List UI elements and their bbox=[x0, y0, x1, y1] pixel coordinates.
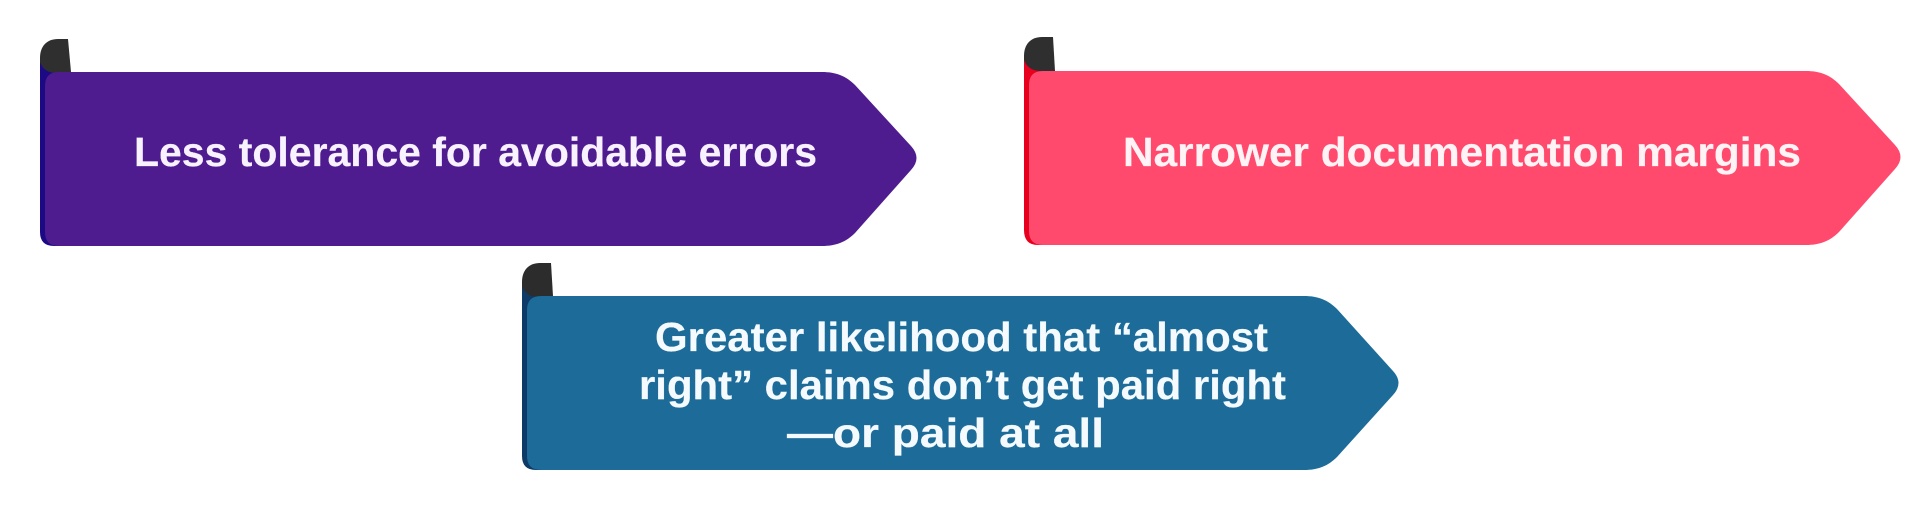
banner: greater likelihood bbox=[522, 263, 1398, 470]
banner: narrower documentation margins bbox=[1024, 37, 1900, 245]
label: greater likelihood text bbox=[639, 314, 1286, 456]
arrow body: purple bbox=[45, 72, 916, 246]
icon: dark tab, teal banner bbox=[522, 263, 553, 297]
label: greater likelihood text: right” claims don’t get paid right bbox=[639, 362, 1286, 408]
icon: dark tab, purple banner bbox=[40, 39, 71, 73]
label: less tolerance: Less tolerance for avoidable errors bbox=[134, 129, 817, 175]
label: narrower documentation margins: Narrower documentation margins bbox=[1123, 129, 1801, 175]
banner fold: red bbox=[1024, 58, 1075, 245]
banner fold: purple bbox=[40, 58, 90, 246]
arrow body: red bbox=[1029, 71, 1900, 245]
label: greater likelihood text: —or paid at all bbox=[787, 410, 1104, 456]
icon: dark tab, red banner bbox=[1024, 37, 1055, 71]
arrow body: teal bbox=[527, 296, 1398, 470]
banner fold: teal bbox=[522, 282, 575, 470]
banner: less tolerance for avoidable errors bbox=[40, 39, 916, 246]
label: greater likelihood text: Greater likelihood that “almost bbox=[655, 314, 1268, 360]
